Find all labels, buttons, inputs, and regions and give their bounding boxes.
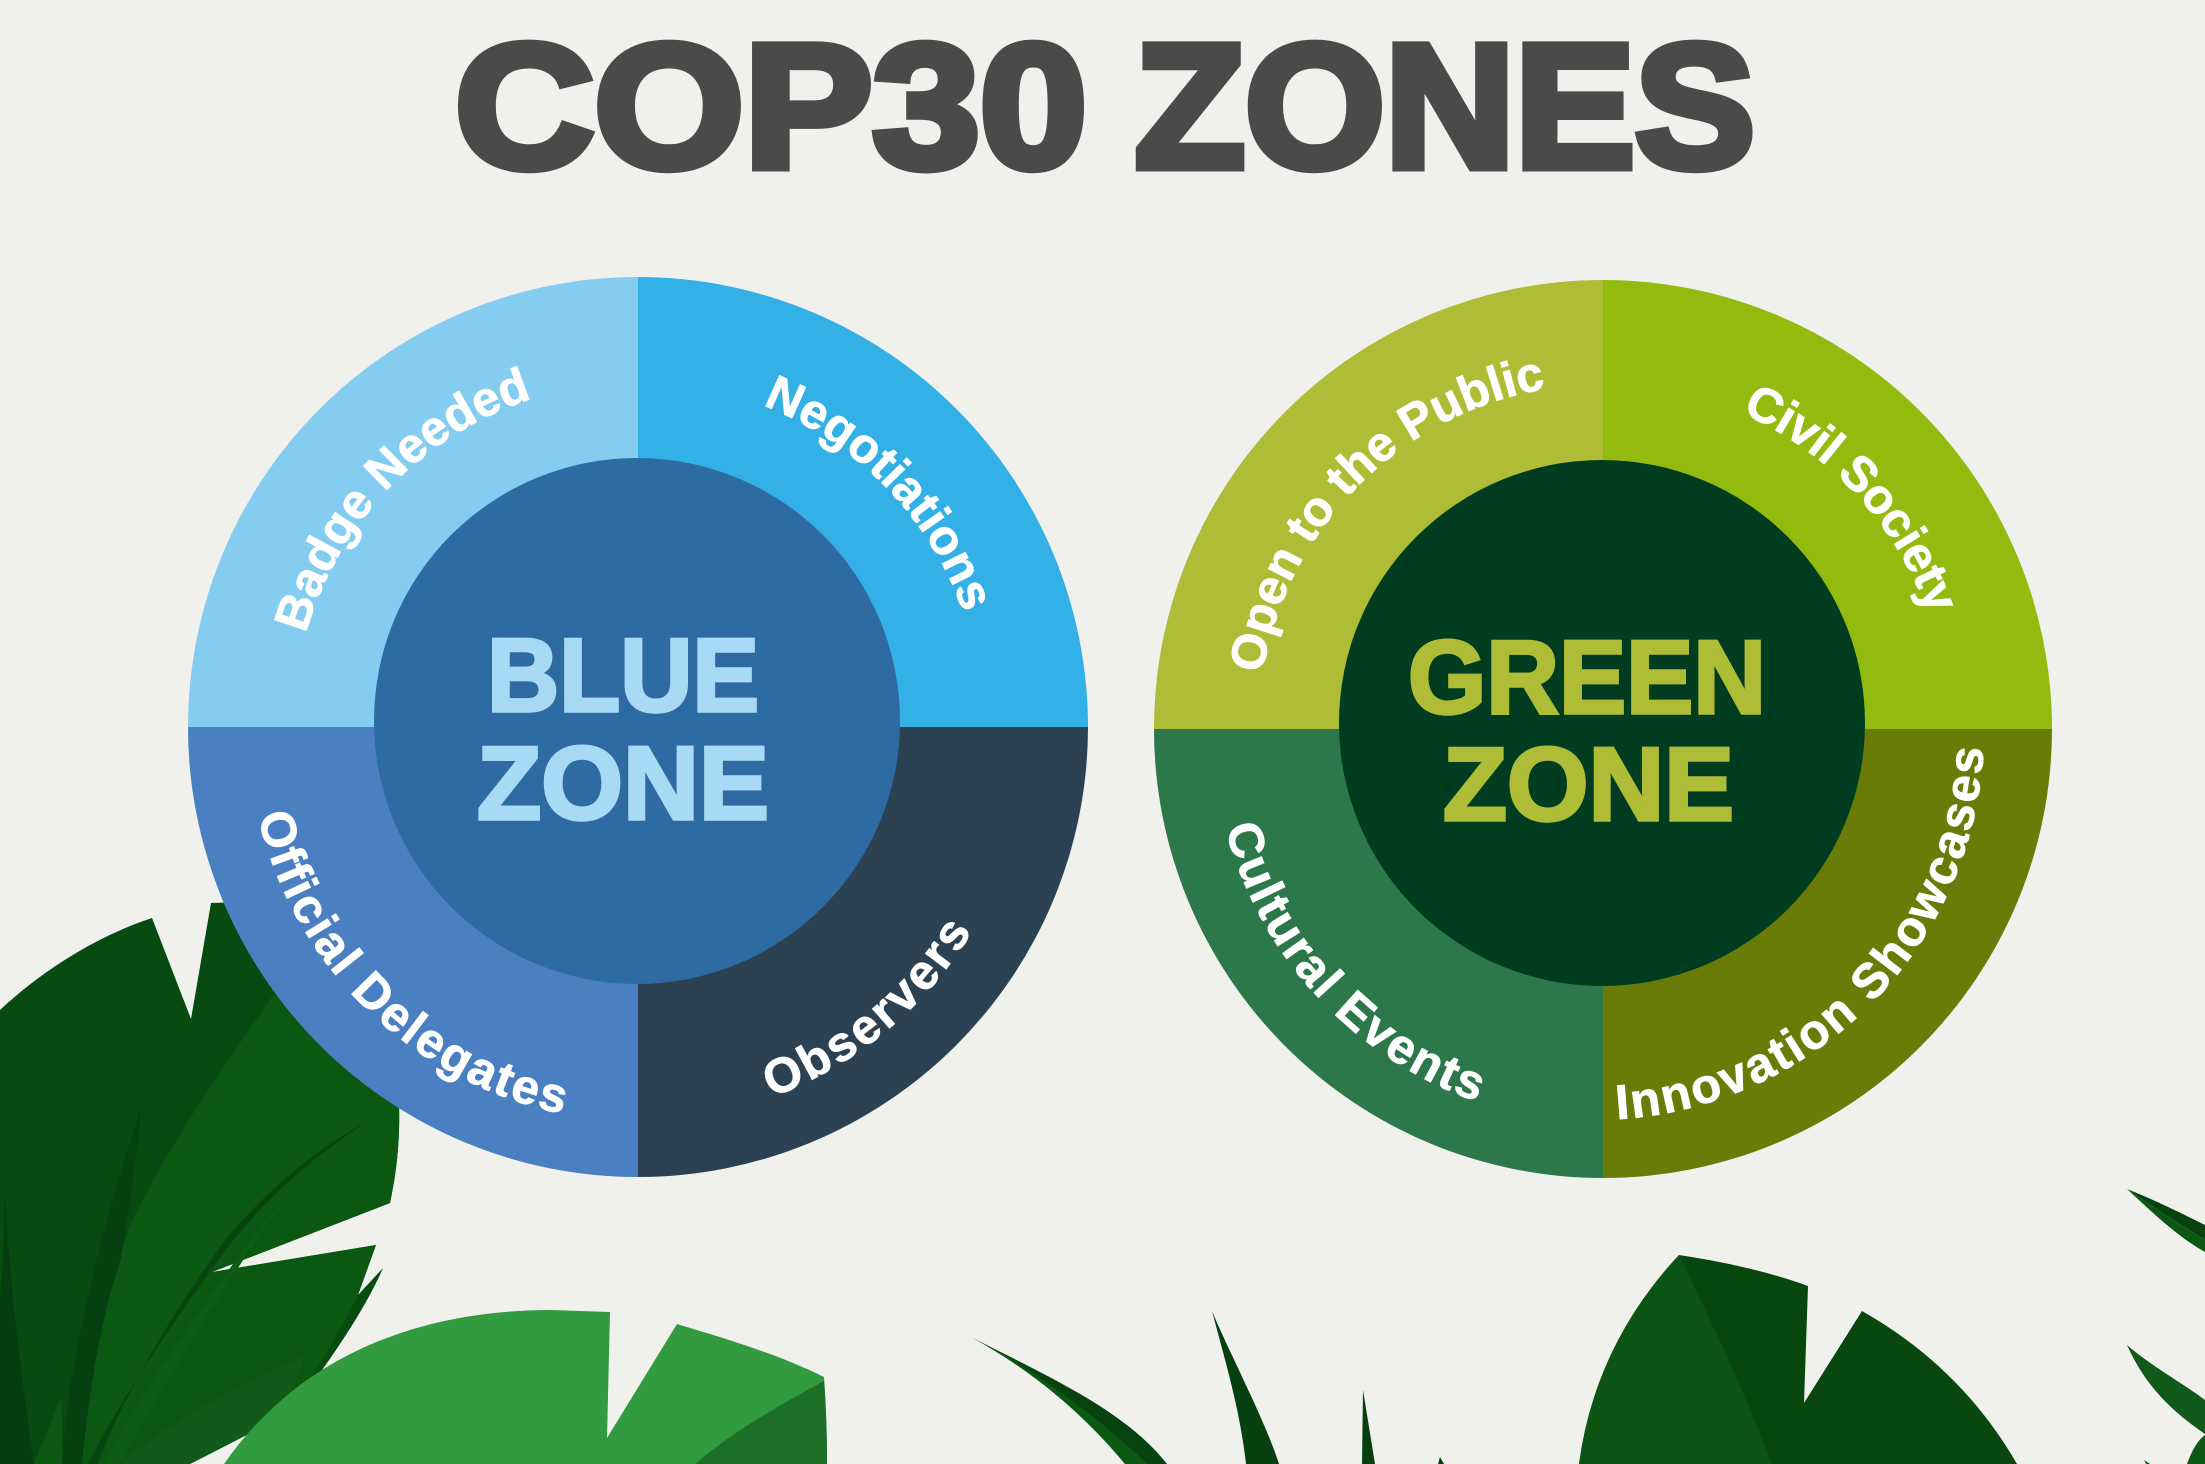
illustration: grass blades — [973, 1311, 1444, 1464]
label: open to the public: Open to the Public — [1232, 360, 1544, 670]
blue zone heading: BLUE — [487, 618, 759, 734]
label: negotiations: Negotiations — [765, 374, 986, 610]
blue zone heading: ZONE — [477, 726, 769, 842]
segment: open to the public — [1154, 280, 1603, 729]
illustration: leaf blades at right edge — [2127, 1189, 2205, 1464]
label: badge needed: Badge Needed — [274, 366, 530, 631]
label: cultural events: Cultural Events — [1228, 823, 1482, 1100]
segment: negotiations — [638, 277, 1088, 727]
blue zone wheel — [188, 277, 1088, 1177]
illustration: large dark leaf bottom left — [0, 900, 399, 1464]
segment: official delegates — [188, 727, 638, 1177]
green zone heading — [1408, 620, 1766, 843]
blue zone heading — [477, 618, 769, 842]
green zone heading: GREEN — [1408, 620, 1766, 736]
segment: innovation showcases — [1603, 729, 2052, 1178]
label: official delegates: Official Delegates — [261, 812, 566, 1112]
illustration: dark leaf bottom right — [1579, 1255, 2017, 1464]
green zone wheel — [1154, 280, 2052, 1178]
blue zone centre circle — [374, 458, 900, 984]
title: ZONES — [1135, 9, 1755, 205]
label: civil society: Civil Society — [1748, 388, 1954, 606]
title — [455, 9, 1755, 205]
illustration: light green leaf — [224, 1310, 827, 1464]
green zone heading: ZONE — [1443, 727, 1734, 843]
title: COP30 — [455, 9, 1087, 205]
label: innovation showcases: Innovation Showcases — [1616, 748, 1984, 1120]
segment: cultural events — [1154, 729, 1603, 1178]
label: observers: Observers — [764, 922, 968, 1093]
segment: civil society — [1603, 280, 2052, 729]
segment: badge needed — [188, 277, 638, 727]
segment: observers — [638, 727, 1088, 1177]
green zone centre circle — [1339, 460, 1865, 986]
